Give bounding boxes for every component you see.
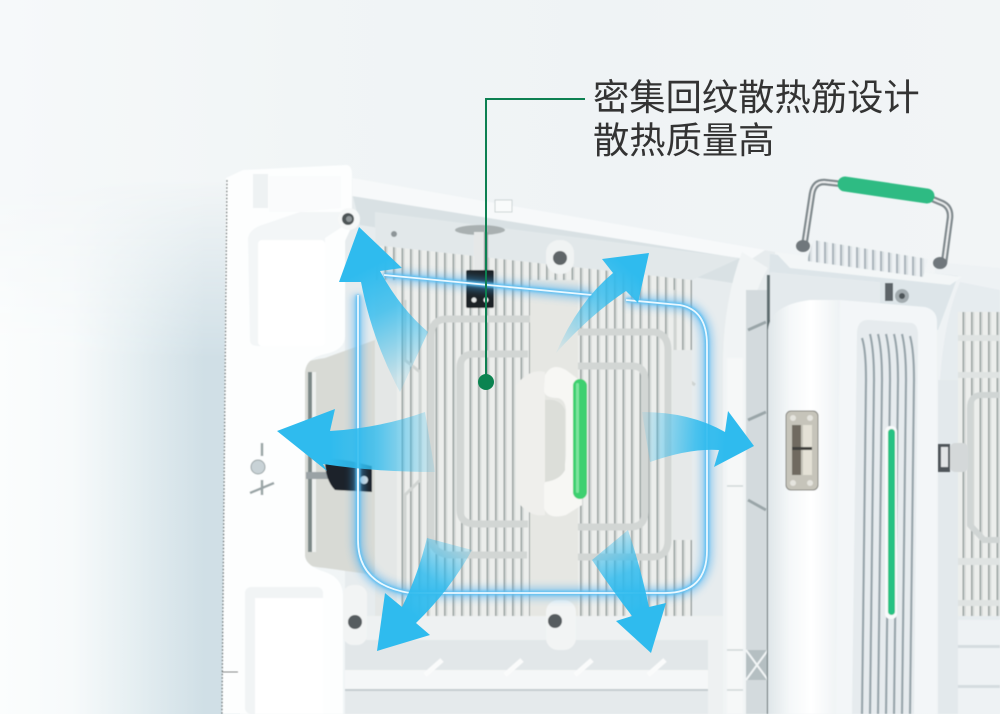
screws — [343, 231, 576, 650]
arrow: bottom-right — [592, 530, 666, 653]
screw hole — [338, 208, 360, 230]
heat-flow arrows — [277, 227, 754, 653]
arrow: right — [642, 411, 754, 467]
background wall with soft shadow — [115, 216, 240, 714]
central handle with green strip — [516, 367, 587, 516]
right rail — [723, 252, 768, 714]
bottom ledge — [345, 616, 723, 714]
arrow: top-left — [339, 227, 428, 392]
carry handle — [804, 182, 950, 263]
callout text: 散热质量高 — [593, 120, 774, 161]
hinge — [786, 411, 818, 490]
callout text — [593, 77, 920, 161]
heat-dissipation fins — [375, 212, 740, 616]
wing nut — [250, 443, 274, 495]
black bolt — [306, 459, 372, 492]
mounting pin and black bracket — [455, 225, 505, 308]
recessed rounded rib frames — [431, 319, 668, 557]
arrow: bottom-left — [377, 538, 472, 651]
callout leader line and dot — [478, 99, 585, 390]
right LED module with door — [767, 182, 968, 714]
glowing blue heat frame — [358, 275, 707, 593]
ribbed top strip — [807, 240, 928, 277]
side latch — [938, 443, 968, 472]
callout text: 密集回纹散热筋设计 — [593, 77, 920, 118]
main LED module body — [343, 178, 775, 714]
side recess — [290, 340, 375, 575]
far-right LED module — [935, 262, 1000, 714]
arrow: left — [277, 409, 435, 472]
small screw and dark clip — [885, 283, 909, 303]
arrow: top-right — [556, 253, 649, 353]
left white frame column — [222, 165, 375, 714]
door panel — [768, 300, 937, 714]
